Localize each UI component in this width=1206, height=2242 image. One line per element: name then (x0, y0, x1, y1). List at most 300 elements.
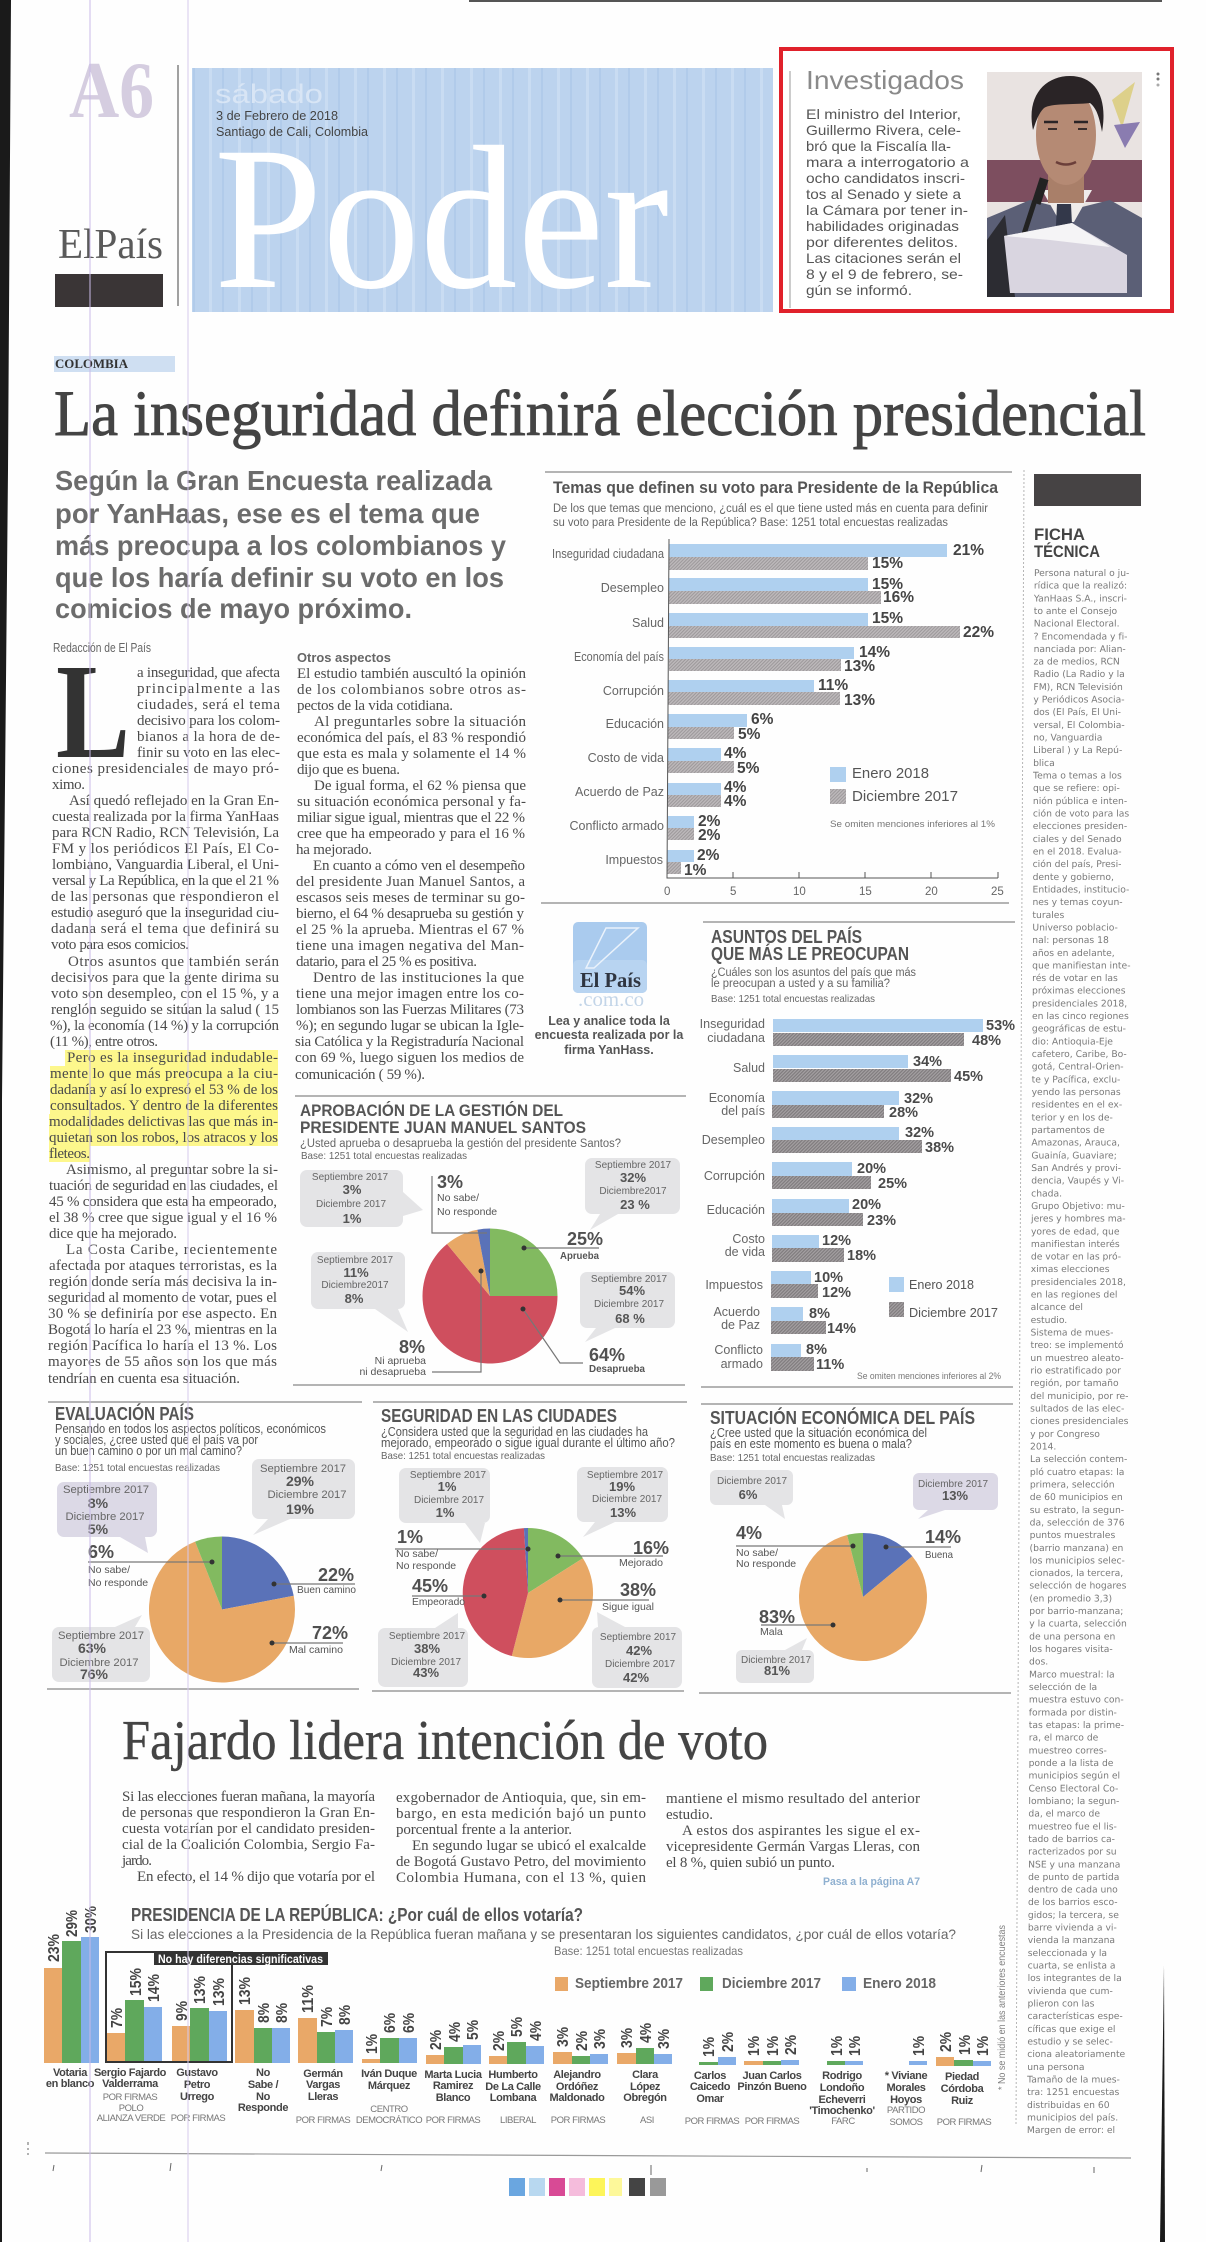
bar chart: 8% (809, 1306, 830, 1322)
article column 2: De igual forma, el 62 % piensa que (314, 778, 526, 794)
candidate names: Echeverri (818, 2094, 866, 2106)
chart question: Base: 1251 total encuestas realizadas (301, 1150, 467, 1162)
text block: ra, el marco de (1029, 1733, 1099, 1744)
callout: aprueba: Septiembre 2017 (595, 1160, 672, 1171)
bar chart (700, 1017, 1015, 1373)
party labels: FARC (831, 2116, 855, 2127)
value labels: 2% (938, 2032, 955, 2052)
callout: mal camino (52, 1615, 150, 1682)
article column 2: de los colombianos sobre otros as- (297, 682, 526, 698)
legend (830, 766, 958, 805)
text block: primera, selección (1030, 1479, 1115, 1490)
article column 1: cuesta realizada por la firma YanHaas (52, 809, 279, 825)
callout: buen camino: Diciembre 2017 (267, 1489, 347, 1501)
bar chart: 8% (806, 1342, 827, 1358)
article column 1: versal y La República, en la que el 21 % (52, 873, 279, 889)
bar chart: 1% (684, 862, 707, 879)
chart question: Base: 1251 total encuestas realizadas (55, 1462, 220, 1474)
callout: no sabe: 5% (88, 1521, 109, 1537)
article column 2: que esta es mala y solamente el 14 % (297, 746, 526, 762)
article column 1: tuación de seguridad en las ciudades, el (49, 1178, 278, 1194)
text block: años en adelante, (1032, 948, 1115, 959)
bar chart: 15% (872, 555, 903, 572)
text block: dos. (1029, 1657, 1048, 1668)
article: Fajardo: vicepresidente Germán Vargas Lleras, con (666, 1839, 920, 1855)
value labels: 3% (619, 2028, 636, 2048)
article column 2: miliar sigue igual, mientras que el 22 % (297, 810, 525, 826)
callout: buen camino: 29% (286, 1473, 315, 1489)
article column 1: 45 % considera que esta ha empeorado, (49, 1194, 277, 1210)
candidate names: Rodrigo (822, 2070, 862, 2082)
text block: versal, El Colombia- (1033, 720, 1125, 731)
chart title: Temas que definen su voto para Presidente de la República (553, 478, 998, 497)
candidate names: Omar (696, 2093, 725, 2105)
bar chart: 25 (991, 886, 1004, 898)
party labels: POR FIRMAS (685, 2116, 739, 2127)
text block: no, Vanguardia (1033, 733, 1102, 744)
bar chart: Inseguridad ciudadana (552, 547, 664, 561)
bar chart: Educación (707, 1203, 765, 1217)
text block: te y Pacífica, exclu- (1032, 1074, 1120, 1085)
text block: estudio. (1031, 1315, 1067, 1326)
text block: manifiestan interés (1031, 1239, 1120, 1250)
icon: El País logo: El País (580, 968, 641, 992)
article column 1: quietan son los robos, los atracos y los (49, 1130, 278, 1146)
pie chart (422, 1228, 558, 1364)
data labels: 1% (397, 1527, 423, 1547)
candidate names: Valderrama (102, 2078, 159, 2090)
value labels: 3% (656, 2029, 673, 2049)
value labels: 15% (128, 1968, 145, 1996)
data labels: 4% (736, 1523, 762, 1543)
data labels: Mejorado (619, 1557, 663, 1569)
callout: buen camino: 19% (286, 1501, 315, 1517)
text block: que se refiere: opi- (1033, 783, 1120, 794)
text block: los hogares visita- (1029, 1644, 1113, 1655)
subheading (55, 465, 506, 624)
bar chart: 10 (793, 886, 806, 898)
candidate names: Piedad (945, 2071, 979, 2083)
value labels: 1% (957, 2035, 974, 2055)
callout: buena (913, 1473, 998, 1519)
text block: características espe- (1027, 2011, 1123, 2022)
text block: nal: personas 18 (1032, 935, 1109, 946)
callout: no sabe: Septiembre 2017 (312, 1172, 389, 1183)
candidate names: Córdoba (941, 2083, 985, 2095)
callout: aprueba: Diciembre2017 (599, 1186, 667, 1197)
article: Fajardo: cial de la Coalición Colombia, Sergio Fa- (122, 1837, 375, 1853)
article column 2: ha mejorado. (296, 842, 372, 858)
value labels (46, 1906, 992, 2057)
callout: mala (736, 1638, 814, 1683)
bar chart: 6% (751, 711, 774, 728)
legend: Diciembre 2017 (722, 1976, 821, 1992)
bar chart: 25% (878, 1176, 907, 1192)
callout: mejorado: 13% (610, 1505, 636, 1520)
chart question: ¿Cuáles son los asuntos del país que más (711, 967, 916, 979)
callout: mal camino: 76% (80, 1666, 109, 1682)
value labels: 13% (237, 1977, 254, 2005)
text block: alcance del (1031, 1302, 1083, 1313)
callout: ni aprueba: Septiembre 2017 (317, 1255, 394, 1266)
text block: los municipios selec- (1029, 1555, 1125, 1566)
chart question: Pensando en todos los aspectos políticos, económicos (55, 1422, 326, 1436)
print colour bars (509, 2178, 666, 2196)
text block: selección de hogares (1029, 1581, 1127, 1592)
chart title (711, 926, 909, 964)
callout: empeorado: Septiembre 2017 (389, 1631, 466, 1642)
callout: desaprueba: 54% (619, 1283, 645, 1298)
panel: Presidencia de la República (44, 1904, 1008, 2128)
chart question: un buen camino o por un mal camino? (55, 1444, 242, 1458)
article column 2: En cuanto a cómo ven el desempeño (313, 858, 525, 874)
bar chart: 4% (724, 793, 747, 810)
text block: dencia, Vaupés y Vi- (1031, 1176, 1124, 1187)
article column 1: mayores de 55 años son los que más (48, 1354, 277, 1370)
section title: Poder (214, 105, 669, 332)
data labels: 16% (633, 1538, 669, 1558)
bar chart: Impuestos (705, 1278, 763, 1292)
callout: no sabe (300, 1170, 423, 1227)
panel: Aprobación de la gestión (293, 1096, 686, 1385)
text block: mara a interrogatorio a (806, 154, 969, 170)
data labels: No sabe/ (396, 1548, 438, 1560)
bar chart: Desempleo (601, 581, 664, 595)
value labels: 3% (592, 2029, 609, 2049)
article column 1 (48, 665, 280, 1387)
text block: en las regiones del (1031, 1290, 1117, 1301)
callout: no sabe: Diciembre 2017 (316, 1199, 386, 1210)
callout: buen camino (252, 1459, 355, 1535)
callout: no sabe: 1% (438, 1479, 457, 1494)
callout: sigue igual (592, 1612, 682, 1688)
callout: desaprueba (580, 1272, 675, 1342)
article column 2: sia Católica y la Registraduría Nacional (295, 1034, 524, 1050)
bar chart: Desempleo (702, 1133, 765, 1147)
text block: Tema o temas a los (1032, 771, 1122, 782)
value labels: 8% (274, 2003, 291, 2023)
section banner: Poder (192, 68, 773, 332)
text block: Las citaciones serán el (806, 250, 961, 266)
callout: no sabe: Septiembre 2017 (410, 1470, 487, 1481)
chart title: QUE MÁS LE PREOCUPAN (711, 943, 909, 964)
black header bar (1034, 474, 1141, 506)
data labels: 3% (437, 1172, 463, 1192)
data labels: 6% (88, 1542, 114, 1562)
chart question: ¿Cree usted que la situación económica del (710, 1426, 927, 1440)
chart question (553, 503, 988, 529)
base note: Base: 1251 total encuestas realizadas (554, 1944, 743, 1958)
value labels: 2% (574, 2031, 591, 2051)
text block: YanHaas S.A., inscri- (1033, 593, 1127, 604)
value labels: 7% (319, 2007, 336, 2027)
callout: sigue igual: Diciembre 2017 (605, 1659, 675, 1670)
article column 2: económica del país, el 83 % respondió (297, 730, 526, 746)
text block: (barrio manzana) en (1030, 1543, 1124, 1554)
candidate names: Clara (632, 2069, 659, 2081)
article column 1: Bogotá lo haría el 23 %, mientras en la (48, 1322, 277, 1338)
heading: FICHA (1034, 525, 1085, 544)
data labels: 64% (589, 1345, 625, 1365)
party labels: POR FIRMAS (171, 2113, 225, 2124)
text block: Grupo Objetivo: mu- (1031, 1201, 1125, 1212)
panel: Investigados (781, 49, 1172, 311)
text block: próximas elecciones (1032, 986, 1126, 997)
data labels: No sabe/ (88, 1564, 130, 1576)
article column 1: decisivo para los colom- (137, 713, 280, 729)
text block: ciales y del Senado (1033, 834, 1122, 845)
bar chart: 5 (730, 886, 736, 898)
data labels: No responde (437, 1206, 497, 1218)
panel: Situación económica (699, 1404, 1013, 1693)
text block: ximas elecciones (1031, 1264, 1110, 1275)
text block: tra: 1251 encuestas (1027, 2087, 1119, 2098)
article column 1: lombiano, Vanguardia Liberal, el Uni- (52, 857, 279, 873)
callout: aprueba (585, 1158, 680, 1230)
article: Fajardo: el 8 %, quien subió un punto. (666, 1855, 835, 1871)
callout: aprueba: 32% (620, 1170, 646, 1185)
data labels: Buena (925, 1549, 953, 1561)
promo text: firma YanHass. (564, 1043, 654, 1057)
bar chart: de vida (725, 1245, 765, 1259)
text block: presidenciales 2018, (1031, 1277, 1126, 1288)
text block: blica (1033, 758, 1055, 769)
candidate names (46, 2067, 985, 2117)
callout: no hay diferencias: No hay diferencias significativas (158, 1954, 323, 1966)
bar chart: 48% (972, 1033, 1001, 1049)
text block: lombiano; la segun- (1028, 1796, 1119, 1807)
article column 1: decisivos para que la gente dirima su (51, 970, 280, 986)
article column 1: seguridad al momento de votar, pues el (48, 1290, 277, 1306)
text block: municipios del país. (1027, 2112, 1118, 2123)
value labels: 8% (337, 2005, 354, 2025)
data labels: 14% (925, 1527, 961, 1547)
bar chart: Corrupción (704, 1169, 765, 1183)
bar chart: 18% (847, 1248, 876, 1264)
callout: no sabe: 1% (343, 1211, 362, 1226)
article column 1: voto para esos comicios. (51, 937, 189, 953)
chart question (710, 1426, 927, 1464)
value labels: 23% (46, 1934, 63, 1962)
candidate names: Blanco (436, 2092, 471, 2104)
data labels: Desaprueba (589, 1363, 645, 1375)
callout: empeorado: 38% (414, 1641, 440, 1656)
text block: sultados de las elec- (1030, 1404, 1124, 1415)
text block (806, 106, 969, 298)
article column 1: para RCN Radio, RCN Televisión, La (52, 825, 279, 841)
chart title: PRESIDENCIA DE LA REPÚBLICA: ¿Por cuál de ellos votaría? (131, 1904, 583, 1925)
heading (1034, 525, 1100, 561)
bar chart: 28% (889, 1105, 918, 1121)
main headline: La inseguridad definirá elección presidencial (54, 378, 1146, 450)
chart question: Si las elecciones a la Presidencia de la República fueran mañana y se presentaran los siguientes candidatos, ¿por cuál de ellos votaría? (131, 1926, 956, 1942)
text block: Margen de error: el (1027, 2125, 1115, 2136)
text block: Marco muestral: la (1029, 1669, 1115, 1680)
text block: distribuidas en 60 (1027, 2100, 1110, 2111)
value labels: 8% (256, 2003, 273, 2023)
panel: Ficha técnica (1026, 474, 1141, 2136)
callout: mal camino: 63% (78, 1640, 107, 1656)
candidate names: No (256, 2067, 271, 2079)
subheading: comicios de mayo próximo. (55, 593, 412, 624)
text block: NSE y una manzana (1028, 1859, 1120, 1870)
subheading: que los haría definir su voto en los (55, 562, 504, 593)
value labels: 1% (364, 2034, 381, 2054)
text block: municipios según el (1029, 1771, 1120, 1782)
callout: buen camino: Septiembre 2017 (260, 1463, 346, 1475)
bar chart: 2% (698, 827, 721, 844)
callout: no sabe (710, 1470, 793, 1519)
text block: Entidades, institucio- (1033, 884, 1129, 895)
text block: turales (1032, 910, 1064, 921)
callout: no sabe: Diciembre 2017 (65, 1511, 145, 1523)
highlight (49, 1050, 278, 1162)
text block: en las cinco regiones (1032, 1011, 1129, 1022)
article: Fajardo: Si las elecciones fueran mañana, la mayoría (122, 1789, 375, 1805)
leader lines (395, 1546, 663, 1602)
subheading: por YanHaas, ese es el tema que (55, 498, 480, 529)
party labels: POR FIRMAS (426, 2115, 480, 2126)
article column 1: dadanía y así lo expresó el 53 % de los (50, 1082, 278, 1098)
article column 1: afectada por ataques terroristas, es la (49, 1258, 277, 1274)
candidate names: Votaria (53, 2067, 88, 2079)
text block: cíficas que exige el (1027, 2024, 1116, 2035)
candidate names: Ordóñez (556, 2081, 599, 2093)
article column 1: fleteos. (49, 1146, 90, 1162)
text block: cionados, la tercera, (1029, 1568, 1123, 1579)
data labels: Empeorado (412, 1596, 465, 1608)
article column 2: tiene una mejor imagen entre los co- (296, 986, 524, 1002)
callout: empeorado: Diciembre 2017 (391, 1657, 461, 1668)
note: Se omiten menciones inferiores al 2% (857, 1371, 1001, 1381)
article column 1: 30 % se definiría por ese aspecto. En (48, 1306, 278, 1322)
article column 1: tendrían en cuenta esa situación. (48, 1371, 240, 1387)
section tag (54, 356, 175, 372)
callout: sigue igual: Septiembre 2017 (600, 1632, 677, 1643)
bar chart: 12% (822, 1233, 851, 1249)
text block: Nacional Electoral. (1034, 619, 1120, 630)
text block: yores de edad, que (1031, 1226, 1120, 1237)
article column 1: mente lo que más preocupa a la ciu- (50, 1066, 278, 1082)
callout: no sabe: Septiembre 2017 (63, 1484, 149, 1496)
party labels: POR FIRMAS (745, 2116, 799, 2127)
bar chart: 15% (872, 610, 903, 627)
text block: muestreo corres- (1029, 1745, 1107, 1756)
text block: elecciones presiden- (1033, 821, 1127, 832)
article column 2: del presidente Juan Manuel Santos, a (296, 874, 525, 890)
text block: Guainía, Guaviare; (1031, 1150, 1117, 1161)
bar chart: Acuerdo (713, 1305, 760, 1319)
text block: za de medios, RCN (1034, 657, 1120, 668)
value labels: 1% (975, 2036, 992, 2056)
text block: da, el marco de (1028, 1809, 1100, 1820)
text block: dos (El País, El Uni- (1033, 707, 1121, 718)
date: 3 de Febrero de 2018 (216, 109, 338, 123)
article column 1: (11 %), entre otros. (50, 1034, 158, 1050)
candidate names: Iván Duque (361, 2068, 417, 2080)
text block: y la cuarta, selección (1029, 1619, 1127, 1630)
value labels: 6% (382, 2013, 399, 2033)
party labels: POR FIRMAS (296, 2115, 350, 2126)
callout: empeorado (378, 1613, 468, 1687)
article column 2: su situación económica personal y fa- (297, 794, 526, 810)
candidate names: Lombana (490, 2092, 537, 2104)
candidate names: Márquez (368, 2080, 411, 2092)
article column 1: Pero es la inseguridad indudable- (67, 1050, 278, 1066)
candidate names: Sergio Fajardo (94, 2067, 167, 2079)
value labels: 1% (847, 2036, 864, 2056)
data labels: 25% (567, 1229, 603, 1249)
panel: Seguridad en las ciudades (372, 1402, 687, 1691)
panel: Temas que definen su voto (541, 472, 1012, 903)
article: Fajardo: porcentual frente a la anterior. (396, 1822, 572, 1838)
chart question: Base: 1251 total encuestas realizadas (381, 1450, 545, 1462)
chart question: Base: 1251 total encuestas realizadas (711, 993, 875, 1005)
chart title: SEGURIDAD EN LAS CIUDADES (381, 1406, 617, 1426)
bar chart: Economía (709, 1091, 765, 1105)
text block: tas etapas: la prime- (1029, 1720, 1124, 1731)
value labels: 2% (428, 2030, 445, 2050)
text block: de 60 municipios en (1030, 1492, 1123, 1503)
text block: su estrato, la segun- (1030, 1505, 1124, 1516)
text block: tos al Senado y siete a (806, 186, 961, 202)
article column 1: consultados. Y dentro de la diferentes (50, 1098, 278, 1114)
bar chart: 0 (664, 886, 670, 898)
party labels: PARTIDO (887, 2105, 925, 2116)
bar chart: 10% (814, 1270, 843, 1286)
text block: ciones presidenciales (1030, 1416, 1129, 1427)
article: Fajardo: de Bogotá Gustavo Petro, del movimiento (396, 1854, 646, 1870)
bar chart (552, 539, 1004, 898)
article column 1: Asimismo, al preguntar sobre la si- (66, 1162, 278, 1178)
text block: barre vivienda a vi- (1028, 1923, 1117, 1934)
party labels: ALIANZA VERDE (97, 2113, 165, 2124)
chart question (381, 1425, 675, 1462)
callout: ni aprueba: Diciembre2017 (321, 1280, 389, 1291)
chart question: país en este momento es buena o mala? (710, 1437, 912, 1451)
article column 1: región donde sería más decisiva la in- (49, 1274, 277, 1290)
bar chart: 11% (818, 677, 848, 694)
text block: rídica que la realizó: (1034, 581, 1127, 592)
text block: Persona natural o ju- (1034, 568, 1129, 579)
callout: ni aprueba: 8% (345, 1291, 364, 1306)
value labels: 7% (109, 2008, 126, 2028)
dotted column divider (1016, 470, 1024, 2125)
chart title: ASUNTOS DEL PAÍS (711, 926, 862, 947)
chart question: Base: 1251 total encuestas realizadas (710, 1452, 875, 1464)
text block: Sistema de mues- (1031, 1328, 1113, 1339)
candidate names: Urrego (180, 2091, 215, 2103)
article column 1: dice que ha mejorado. (49, 1226, 177, 1242)
text block: ponde a la lista de (1029, 1758, 1114, 1769)
article column 1: %), la economía (14 %) y la corrupción (50, 1018, 280, 1034)
article column 1: finir su voto en las elec- (137, 745, 280, 761)
bar chart: 15 (859, 886, 872, 898)
article column 2: tiene una imagen negativa del Man- (296, 938, 524, 954)
bar chart: 22% (963, 624, 994, 641)
article column 2: pectos de la vida cotidiana. (297, 698, 453, 714)
chart question: De los que temas que menciono, ¿cuál es el que tiene usted más en cuenta para definir (553, 503, 988, 515)
article: Fajardo: Colombia Humana, con el 13 %, quien (396, 1870, 646, 1886)
text block: nión pública e inten- (1033, 796, 1127, 807)
bar chart: ciudadana (707, 1031, 765, 1045)
text block: ? Encomendada y fi- (1034, 631, 1128, 642)
data labels: Buen camino (297, 1584, 356, 1596)
callout: no sabe: Diciembre 2017 (717, 1476, 787, 1487)
callout: mejorado: 19% (609, 1479, 635, 1494)
text block: plieron con las (1027, 1999, 1095, 2010)
chart question (711, 967, 916, 1005)
